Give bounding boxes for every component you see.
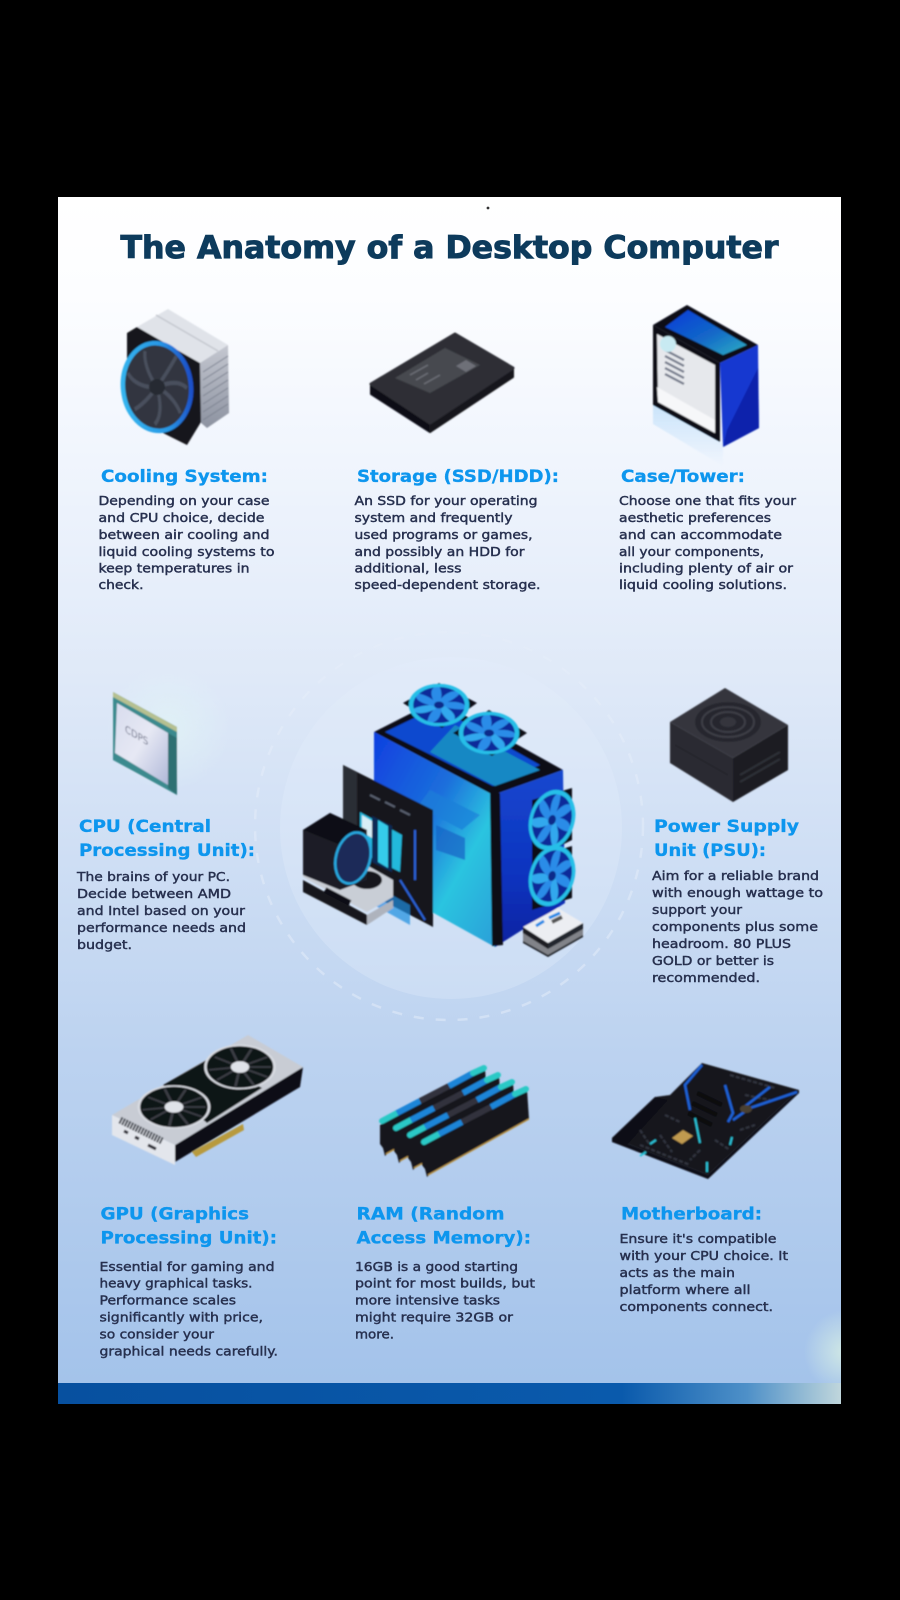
text block [98, 494, 274, 592]
text block [619, 494, 796, 592]
text block: additional, less [354, 562, 462, 576]
icon: SSD [371, 334, 513, 432]
icon: motherboard [612, 1063, 799, 1179]
heading: Access Memory): [356, 1228, 531, 1248]
heading [356, 1204, 531, 1248]
text block: An SSD for your operating [354, 494, 538, 508]
hard drives [523, 925, 583, 957]
text block: platform where all [620, 1283, 750, 1297]
heading: Motherboard: [621, 1204, 762, 1224]
text block: more. [355, 1328, 394, 1342]
text block: aesthetic preferences [619, 511, 771, 525]
heading [79, 817, 255, 861]
panel: cooling system [98, 309, 274, 592]
text block: Aim for a reliable brand [652, 869, 819, 883]
text block: so consider your [100, 1328, 214, 1342]
text block: support your [652, 903, 742, 917]
heading: Unit (PSU): [654, 841, 766, 861]
text block: and possibly an HDD for [354, 545, 525, 559]
text block: might require 32GB or [355, 1310, 513, 1324]
text block: performance needs and [77, 921, 246, 935]
text block: system and frequently [354, 511, 512, 525]
heading [654, 817, 799, 861]
icon: processor chip [106, 666, 230, 795]
text block: and can accommodate [619, 528, 782, 542]
text block: Ensure it's compatible [620, 1232, 776, 1246]
central hub [255, 632, 643, 1020]
text block: Performance scales [100, 1294, 236, 1308]
icon: processor chip: CDPS [125, 724, 148, 749]
text block: Decide between AMD [77, 887, 231, 901]
icon: CPU air cooler [119, 309, 229, 445]
icon: memory sticks [380, 1068, 529, 1177]
icon: graphics card [112, 1035, 303, 1165]
text block [354, 494, 540, 592]
GPU [303, 850, 393, 912]
text block: including plenty of air or [619, 562, 793, 576]
panel: power supply [652, 688, 823, 985]
text block: 16GB is a good starting [355, 1260, 518, 1274]
top fans [403, 683, 527, 756]
text block: heavy graphical tasks. [100, 1276, 252, 1290]
text block: GOLD or better is [652, 954, 774, 968]
heading: Case/Tower: [621, 467, 745, 487]
panel: motherboard [612, 1063, 799, 1314]
background panel [58, 197, 841, 1404]
panel: RAM [355, 1068, 535, 1342]
text block: with your CPU choice. It [620, 1249, 788, 1263]
text block: used programs or games, [354, 528, 532, 542]
text block: and Intel based on your [77, 904, 245, 918]
heading: Processing Unit): [79, 841, 255, 861]
text block: more intensive tasks [355, 1294, 500, 1308]
side fans [521, 784, 583, 912]
heading: Storage (SSD/HDD): [357, 467, 559, 487]
text block: Essential for gaming and [100, 1260, 274, 1274]
text block: headroom. 80 PLUS [652, 937, 791, 951]
footer band [58, 1383, 841, 1404]
text block: budget. [77, 938, 132, 952]
text block [652, 869, 823, 985]
text block: keep temperatures in [98, 562, 250, 576]
heading: RAM (Random [356, 1204, 504, 1224]
text block: speed-dependent storage. [354, 578, 540, 592]
icon: PSU box [670, 688, 788, 802]
text block: all your components, [619, 545, 764, 559]
panel: storage [354, 334, 559, 592]
text block: point for most builds, but [355, 1276, 535, 1290]
heading: GPU (Graphics [100, 1204, 249, 1224]
text block: significantly with price, [100, 1310, 263, 1324]
text block: liquid cooling systems to [98, 545, 274, 559]
text block: acts as the main [620, 1266, 735, 1280]
heading [100, 1204, 277, 1248]
text block: graphical needs carefully. [100, 1344, 278, 1358]
text block: and CPU choice, decide [98, 511, 264, 525]
text block: components plus some [652, 920, 818, 934]
text block: components connect. [620, 1300, 773, 1314]
text block: recommended. [652, 971, 760, 985]
text block: between air cooling and [98, 528, 270, 542]
inner circle [280, 657, 622, 999]
illustration: assembled PC [303, 683, 583, 957]
text block: check. [98, 578, 144, 592]
dashed ring [255, 632, 643, 1020]
small dot [487, 207, 489, 209]
cooler block [303, 813, 367, 890]
panel: CPU [76, 666, 255, 952]
text block [100, 1260, 278, 1358]
text block: Choose one that fits your [619, 494, 796, 508]
panel: GPU [100, 1035, 303, 1358]
text block: with enough wattage to [652, 886, 823, 900]
heading: Processing Unit): [100, 1228, 277, 1248]
text block [76, 870, 246, 952]
heading: Cooling System: [101, 467, 268, 487]
icon: PC case [653, 305, 759, 466]
title: The Anatomy of a Desktop Computer [120, 230, 779, 266]
text block: The brains of your PC. [76, 870, 230, 884]
text block [620, 1232, 788, 1314]
panel: case/tower [619, 305, 796, 592]
heading: CPU (Central [79, 817, 211, 837]
text block [355, 1260, 535, 1342]
footer glow [800, 1310, 841, 1383]
motherboard [343, 765, 433, 927]
text block: Depending on your case [98, 494, 270, 508]
text block: liquid cooling solutions. [619, 578, 787, 592]
heading: Power Supply [654, 817, 799, 837]
